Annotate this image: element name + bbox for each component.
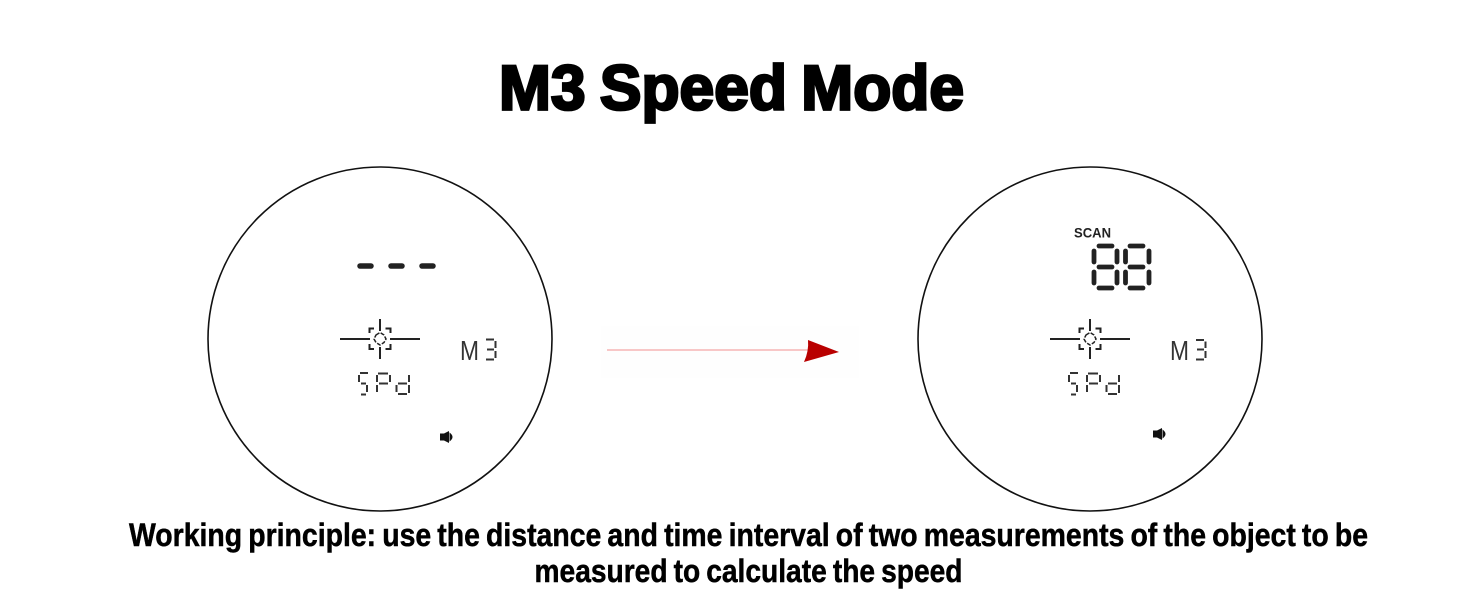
M3 mode label, left: M xyxy=(460,335,479,366)
88 segment readout xyxy=(1094,246,1149,288)
circular viewfinder, left xyxy=(208,167,552,511)
M3 mode label, left xyxy=(460,335,496,366)
panel: display while scanning xyxy=(918,167,1262,511)
SCAN label: SCAN xyxy=(1074,224,1111,240)
reticle, left xyxy=(340,319,420,359)
icon: speaker, right xyxy=(1153,428,1165,440)
SPd segment label, right xyxy=(1069,373,1119,394)
three dashes readout xyxy=(360,263,433,269)
caption: measured to calculate the speed xyxy=(534,553,962,589)
caption xyxy=(129,517,1368,589)
arrow from before to after xyxy=(601,326,859,378)
circular viewfinder, right xyxy=(918,167,1262,511)
title: M3 Speed Mode xyxy=(499,54,964,124)
icon: speaker, left xyxy=(440,431,452,443)
panel: display before measuring xyxy=(208,167,552,511)
M3 mode label, right: M xyxy=(1170,335,1189,366)
reticle, right xyxy=(1050,319,1130,359)
M3 mode label, right xyxy=(1170,335,1206,366)
SPd segment label, left xyxy=(359,373,409,394)
